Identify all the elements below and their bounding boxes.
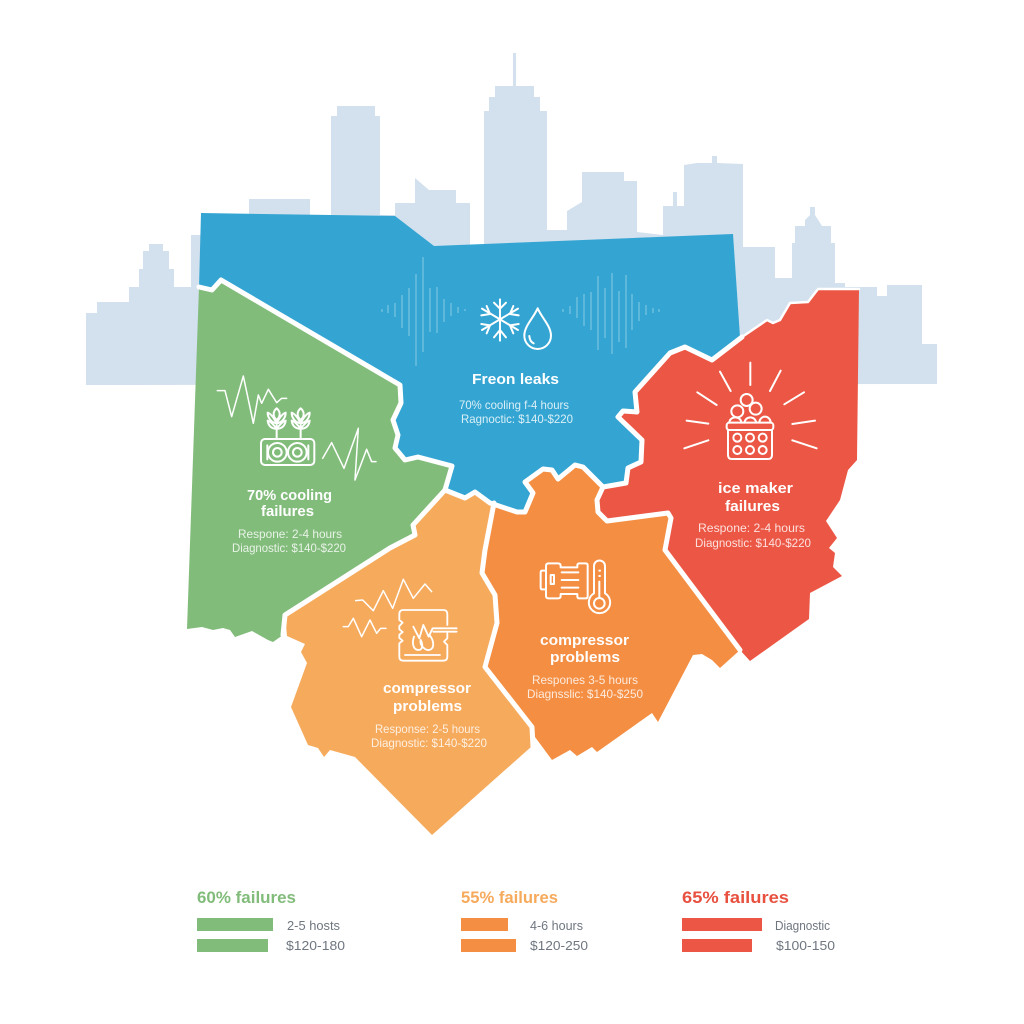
response and diagnostic details [232, 527, 346, 555]
response and diagnostic details [695, 521, 811, 550]
response and diagnostic details: Diagnostic: $140-$220 [371, 736, 487, 750]
map region: compressor problems (light orange) [285, 490, 532, 835]
legend labels [530, 918, 588, 953]
heading [540, 633, 629, 666]
legend labels: 2-5 hosts [287, 918, 340, 933]
legend labels: $120-250 [530, 938, 588, 953]
response and diagnostic details: Diagnsslic: $140-$250 [527, 687, 643, 701]
response and diagnostic details [527, 673, 643, 701]
icon: snowflake [481, 299, 519, 341]
response and diagnostic details: Ragnoctic: $140-$220 [461, 412, 573, 426]
legend: orange [461, 888, 588, 953]
legend labels: 4-6 hours [530, 918, 583, 933]
icon: pulse lines [343, 579, 432, 637]
heading: problems [393, 699, 462, 715]
response and diagnostic details: Respones 3-5 hours [532, 673, 638, 687]
legend labels: Diagnostic [775, 918, 830, 933]
response and diagnostic details [371, 722, 487, 750]
heading: 70% cooling [247, 488, 332, 504]
legend: green [197, 888, 345, 953]
response and diagnostic details: 70% cooling f-4 hours [459, 398, 569, 412]
heading: compressor [540, 633, 629, 649]
response and diagnostic details: Diagnostic: $140-$220 [695, 536, 811, 550]
map region: ice maker failures (red) [597, 289, 859, 661]
heading: problems [550, 650, 620, 666]
legend labels: $120-180 [286, 938, 345, 953]
heading [247, 488, 332, 520]
legend bars [197, 918, 273, 952]
heading: failures [261, 504, 314, 520]
icon: compressor with flame [399, 610, 457, 661]
heading: compressor [383, 681, 471, 697]
waveform left [382, 257, 465, 366]
response and diagnostic details [459, 398, 573, 426]
legend labels [286, 918, 345, 953]
heading: failures [725, 499, 780, 515]
city skyline background [86, 53, 937, 385]
heading [718, 481, 793, 515]
map region: Freon leaks (blue) [199, 213, 740, 530]
map region: cooling failures (green) [187, 280, 452, 642]
icon: ice bin with rays [684, 363, 817, 459]
response and diagnostic details: Response: 2-5 hours [375, 722, 480, 736]
white region borders [199, 280, 859, 747]
icon: pulse lines [217, 376, 376, 480]
legend: red [682, 888, 835, 953]
legend labels [775, 918, 835, 953]
legend bars [682, 918, 762, 952]
heading [383, 681, 471, 715]
response and diagnostic details: Respone: 2-4 hours [238, 527, 342, 541]
response and diagnostic details: Respone: 2-4 hours [698, 521, 805, 535]
legend bars [461, 918, 516, 952]
icon: compressor and thermometer [541, 560, 610, 613]
legend heading: 65% failures [682, 888, 789, 907]
icon: evaporator with plants [261, 408, 314, 465]
icon: water drop [524, 308, 551, 349]
response and diagnostic details: Diagnostic: $140-$220 [232, 541, 346, 555]
waveform right [563, 273, 659, 354]
legend heading: 60% failures [197, 888, 296, 907]
map region: compressor problems (dark orange) [482, 465, 740, 760]
heading: Freon leaks [472, 372, 559, 388]
legend heading: 55% failures [461, 888, 558, 907]
legend labels: $100-150 [776, 938, 835, 953]
heading: ice maker [718, 481, 793, 497]
